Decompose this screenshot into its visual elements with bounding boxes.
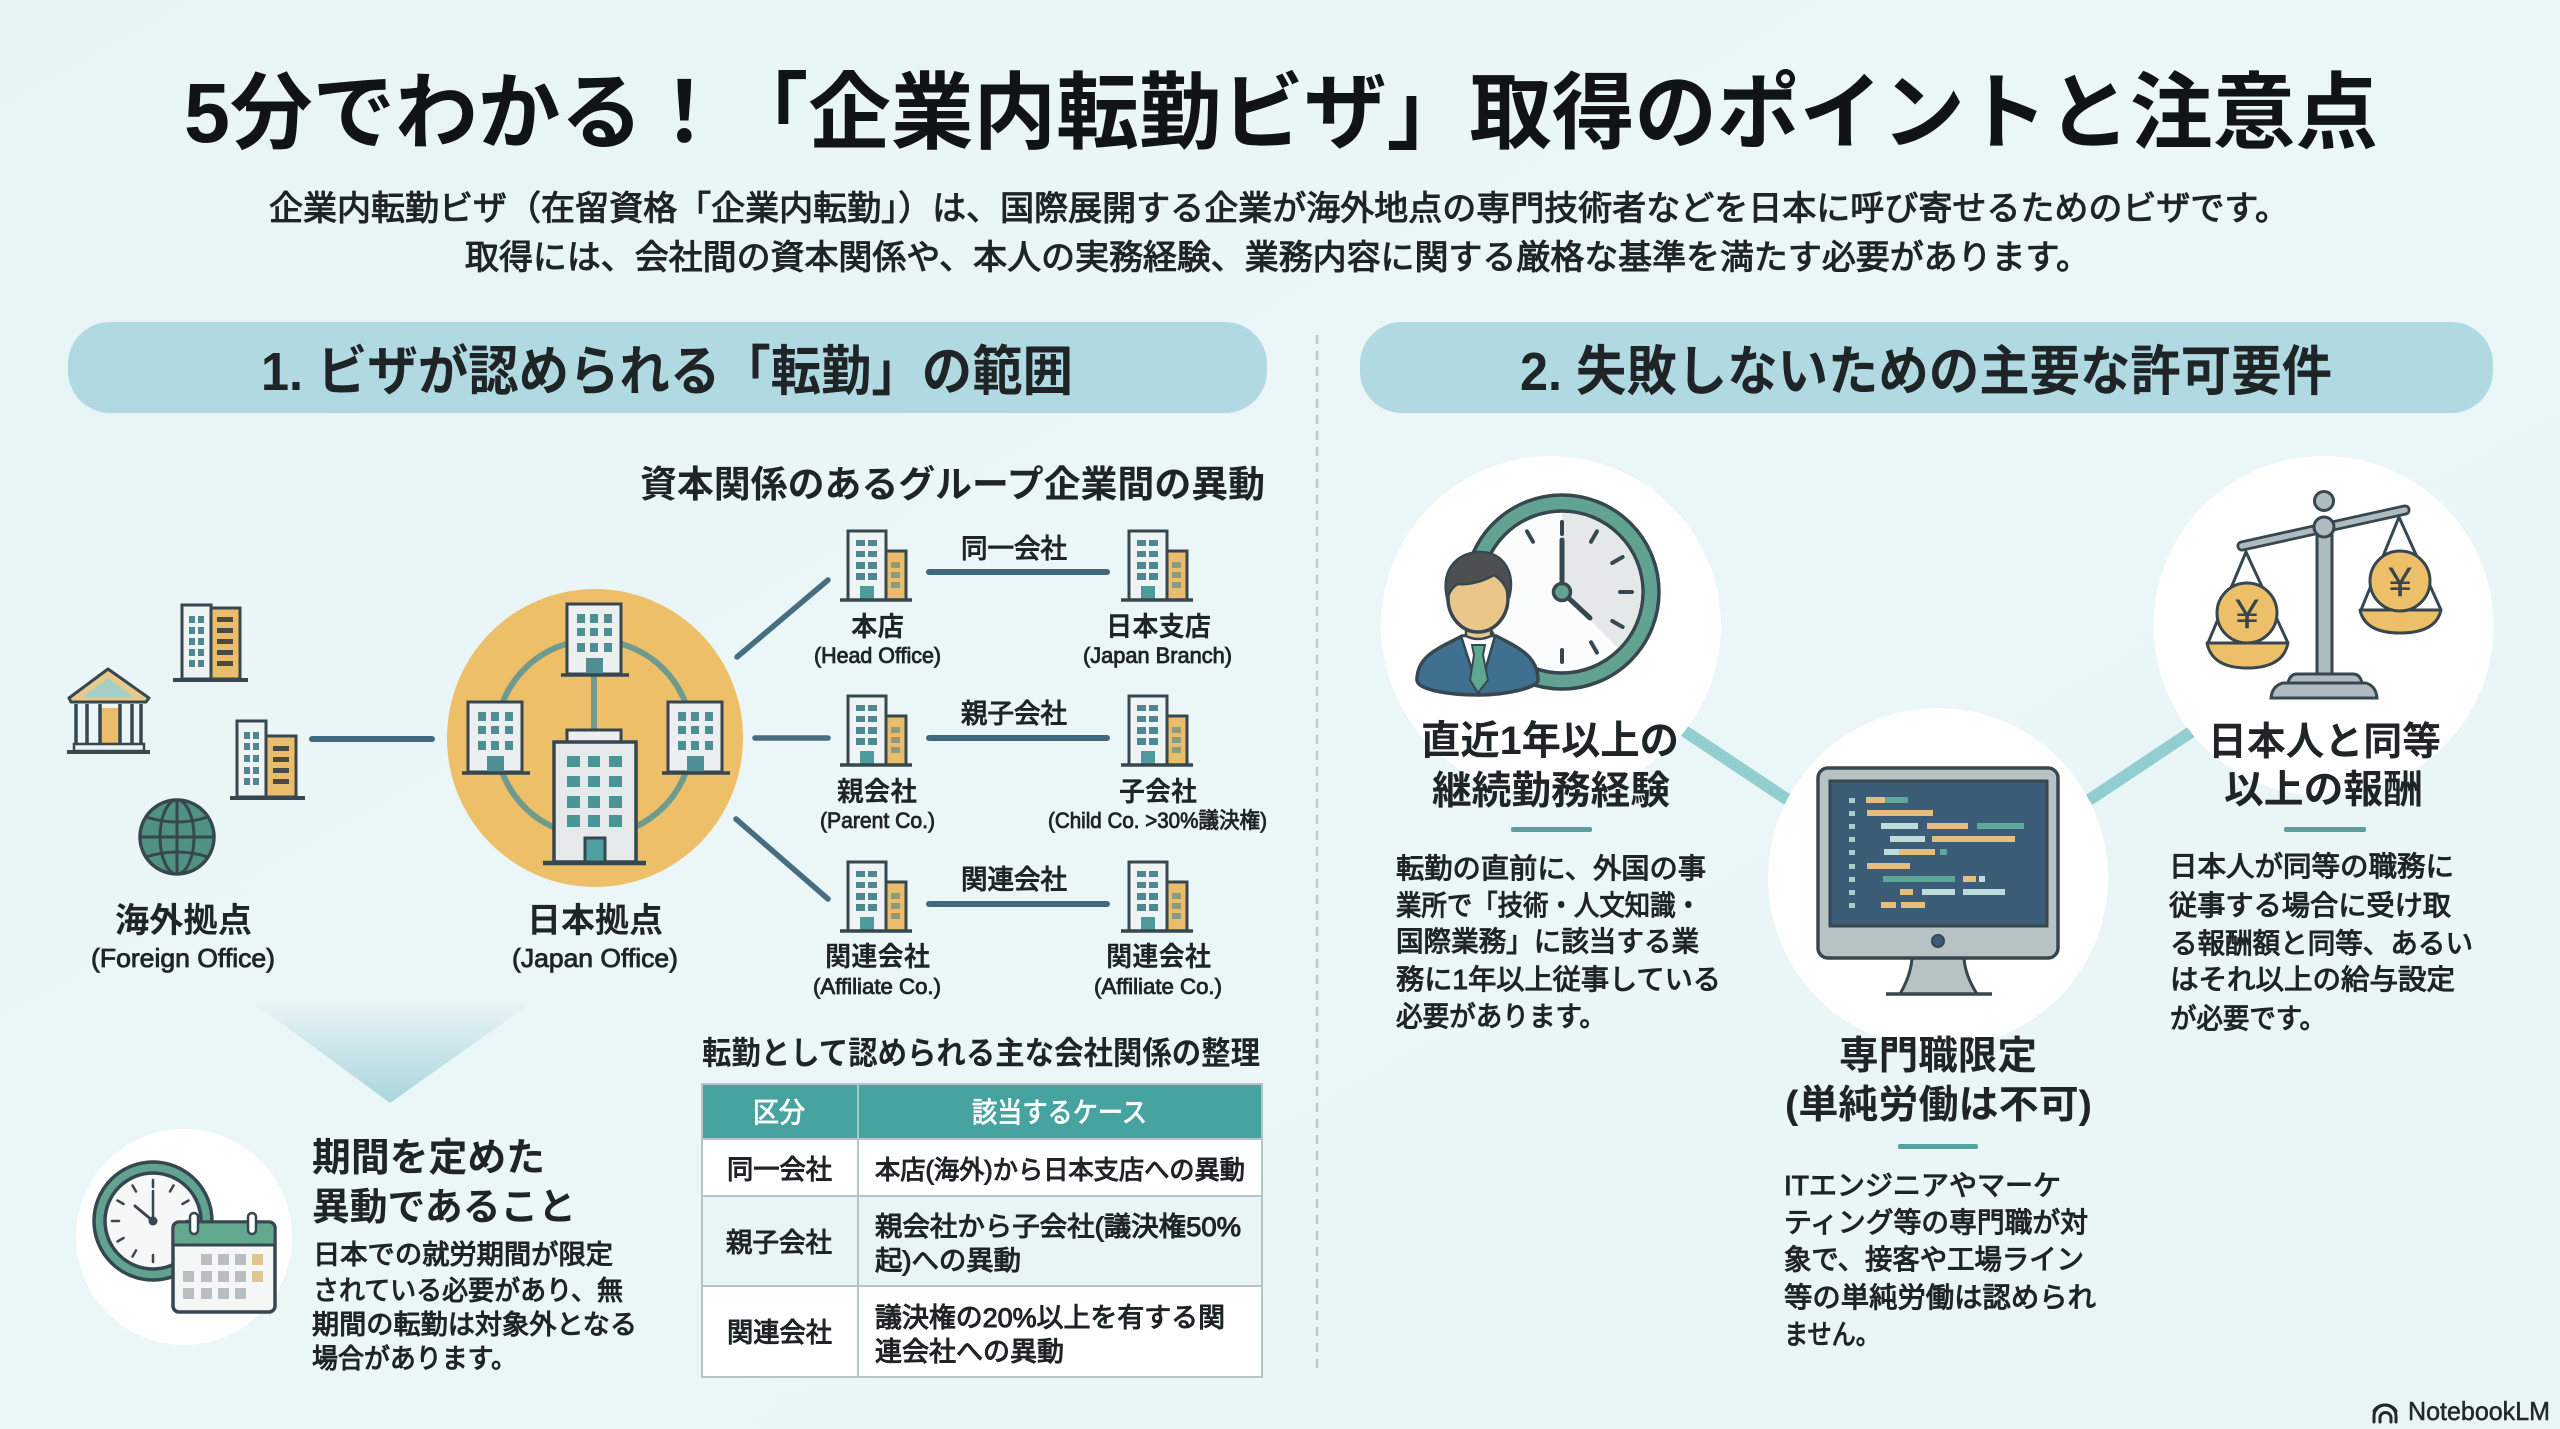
connectors from hub [736,580,828,899]
row: parent and child company: (Child Co. >30%議決権) [1048,808,1267,833]
icon: globe [140,800,214,874]
table: company relations: 同一会社 [727,1155,832,1185]
requirement 1 text: 業所で「技術・人文知識・ [1396,890,1701,921]
coin: right [2370,551,2430,611]
section header 1: 1. ビザが認められる「転勤」の範囲 [261,342,1073,402]
row: same company: (Japan Branch) [1083,643,1232,668]
table: company relations: 該当するケース [972,1097,1147,1128]
requirement 1 text [1396,719,1721,1032]
label: foreign office: 海外拠点 [115,902,252,940]
requirement 2 text: 象で、接客や工場ライン [1784,1244,2084,1275]
code lines [1849,797,2024,908]
label: japan office [512,902,678,973]
label: japan office: 日本拠点 [527,902,663,940]
table: company relations: 区分 [753,1097,805,1128]
table: company relations: 本店(海外)から日本支店への異動 [875,1155,1245,1185]
intro text [269,190,2289,277]
table: company relations [702,1084,1262,1377]
text: fixed period: 日本での就労期間が限定 [313,1240,613,1270]
section header 1 [68,322,1267,413]
requirement 2 text: (単純労働は不可) [1785,1084,2092,1127]
section header 2: 2. 失敗しないための主要な許可要件 [1520,342,2332,402]
icon: japan office hub [447,589,743,887]
icon: bank [67,669,150,752]
label: foreign office [91,902,275,973]
requirement 2 text: ません。 [1784,1319,1880,1350]
requirement 1 text: 継続勤務経験 [1432,770,1670,813]
intro text: 企業内転勤ビザ（在留資格「企業内転勤」）は、国際展開する企業が海外地点の専門技術者などを日本に呼び寄せるためのビザです。 [269,190,2289,228]
coin: left: ¥ [2234,590,2259,637]
icon: person [1417,552,1538,695]
icon: foreign building 1 [173,605,248,680]
requirement 2 text: 等の単純労働は認められ [1784,1282,2096,1313]
requirement 3 text: 日本人と同等 [2208,721,2441,764]
icon: clock and calendar [76,1129,292,1345]
text: fixed period: 期間の転勤は対象外となる [312,1310,637,1340]
row: affiliate companies: (Affiliate Co.) [813,974,941,999]
row: parent and child company: 子会社 [1119,777,1197,807]
requirement 1 text: 直近1年以上の [1421,719,1679,763]
table: company relations: 議決権の20%以上を有する関 [875,1303,1225,1333]
requirement 2 text: ITエンジニアやマーケ [1784,1170,2061,1201]
text: fixed period: されている必要があり、無 [313,1276,623,1306]
coin: left [2217,583,2277,643]
requirement 3 text: 以上の報酬 [2224,769,2423,812]
row: parent and child company: 親子会社 [961,699,1067,729]
requirement 3 text: 従事する場合に受け取 [2169,890,2451,921]
row: affiliate companies [813,862,1222,999]
icon: central tower [543,730,646,863]
icon: computer monitor [1768,708,2108,1048]
row: parent and child company [820,696,1267,833]
requirement 2 text [1784,1035,2096,1350]
table: company relations: 起)への異動 [875,1246,1021,1276]
table: company relations: 連会社への異動 [875,1337,1064,1367]
row: same company [814,531,1232,668]
table title: 転勤として認められる主な会社関係の整理 [702,1035,1260,1071]
row: same company: (Head Office) [814,643,941,668]
icon: foreign building 2 [230,721,305,798]
requirement 2 text: 専門職限定 [1839,1035,2037,1078]
text: fixed period: 期間を定めた [312,1137,545,1180]
row: same company: 本店 [851,612,904,642]
heading: group transfer: 資本関係のあるグループ企業間の異動 [640,464,1265,505]
requirement 3 text: 日本人が同等の職務に [2169,851,2454,882]
logo: NotebookLM: NotebookLM [2408,1396,2550,1426]
label: foreign office: (Foreign Office) [91,943,275,973]
table: company relations: 関連会社 [727,1318,832,1348]
row: affiliate companies: 関連会社 [825,942,930,972]
label: japan office: (Japan Office) [512,943,678,973]
row: affiliate companies: (Affiliate Co.) [1094,974,1222,999]
requirement 3 text: る報酬額と同等、あるい [2170,928,2473,959]
row: parent and child company: 親会社 [837,777,917,807]
row: parent and child company: (Parent Co.) [820,808,935,833]
text: fixed period: 場合があります。 [312,1344,517,1374]
requirement 1 text: 転勤の直前に、外国の事 [1396,853,1706,884]
row: same company: 日本支店 [1106,612,1211,642]
table: company relations: 親子会社 [726,1228,832,1258]
text: fixed period: 異動であること [312,1187,576,1229]
table: company relations: 親会社から子会社(議決権50% [875,1212,1241,1242]
requirement 3 text: が必要です。 [2170,1003,2326,1034]
arrow: down triangle [254,1003,531,1103]
requirement 1 text: 国際業務」に該当する業 [1396,926,1699,957]
requirement 3 text: はそれ以上の給与設定 [2170,964,2455,995]
requirement 1 text: 務に1年以上従事している [1396,964,1721,995]
connectors between requirements [1683,730,2194,800]
requirement 1 text: 必要があります。 [1396,1001,1606,1032]
icon: balance scale [2154,456,2494,796]
intro text: 取得には、会社間の資本関係や、本人の実務経験、業務内容に関する厳格な基準を満たす必要があります。 [465,239,2090,277]
icon: person and clock [1381,456,1721,796]
row: affiliate companies: 関連会社 [1106,942,1211,972]
text: fixed period [312,1137,637,1374]
arrow: foreign to japan [312,736,432,742]
requirement 2 text: ティング等の専門職が対 [1784,1207,2088,1238]
section header 2 [1360,322,2493,413]
row: same company: 同一会社 [961,534,1067,564]
icon: foreign office cluster [67,605,305,874]
coin: right: ¥ [2387,558,2412,605]
row: affiliate companies: 関連会社 [961,865,1067,895]
requirement 3 text [2169,721,2473,1034]
title: 5分でわかる！「企業内転勤ビザ」取得のポイントと注意点 [184,66,2378,160]
